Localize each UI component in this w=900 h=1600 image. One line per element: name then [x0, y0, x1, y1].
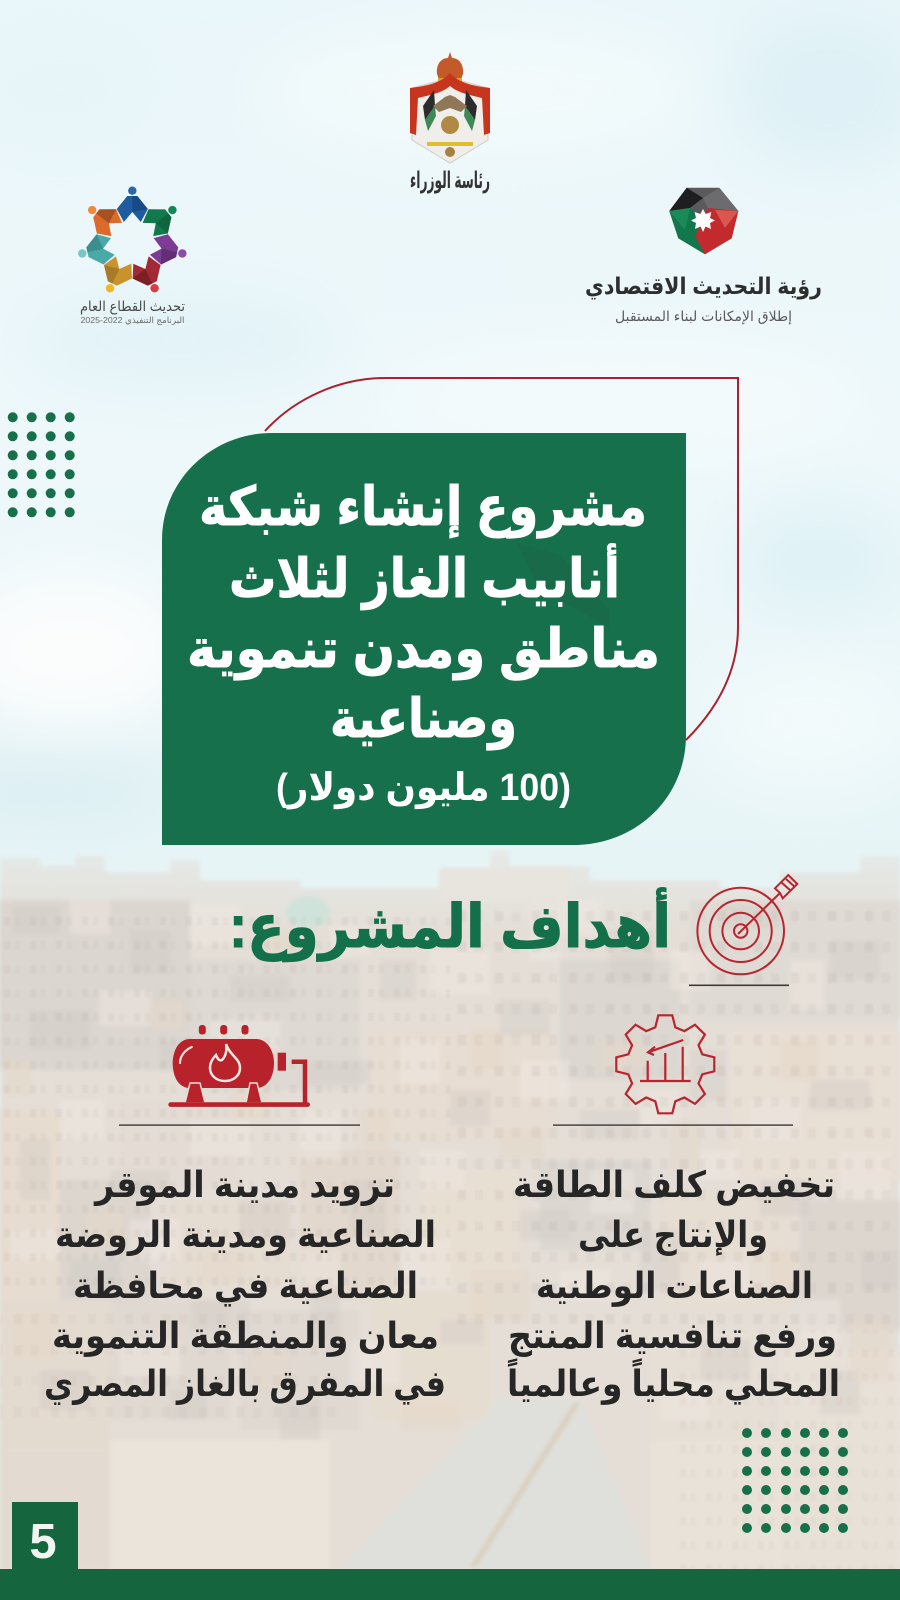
heading: project goals: أهداف المشروع:	[229, 887, 671, 962]
polygon emblem	[669, 188, 738, 254]
crown	[437, 52, 463, 84]
goal text: left column: في المفرق بالغاز المصري	[44, 1363, 446, 1405]
caption: رئاسة الوزراء	[410, 167, 490, 194]
flags	[423, 90, 477, 131]
mantle	[410, 73, 490, 135]
divider under heading icon	[689, 984, 789, 986]
icon: gas tank	[168, 1025, 310, 1107]
logo: public sector modernisation	[75, 186, 190, 325]
dots top left	[8, 412, 75, 517]
goal text: right column: المحلي محلياً وعالمياً	[507, 1358, 840, 1405]
title line 2: أنابيب الغاز لثلاث	[229, 543, 620, 610]
title panel red outline	[265, 378, 738, 740]
goal text: left column: الصناعية ومدينة الروضة	[55, 1214, 436, 1256]
star	[445, 147, 455, 157]
logo: economic modernisation vision	[585, 188, 822, 325]
goal text: right column: ورفع تنافسية المنتج	[508, 1315, 837, 1357]
goal text: left column: معان والمنطقة التنموية	[52, 1315, 439, 1357]
background: faded city photograph	[0, 850, 900, 1600]
goal text: right column: الصناعات الوطنية	[536, 1265, 813, 1307]
star	[691, 209, 715, 232]
title line 3: مناطق ومدن تنموية	[187, 619, 660, 680]
globe	[441, 116, 459, 134]
icon: target with arrow	[697, 875, 797, 974]
icon: gear with falling cost chart	[616, 1015, 714, 1113]
goal text: left column: تزويد مدينة الموقر	[93, 1164, 395, 1206]
goal text: right column: تخفيض كلف الطاقة	[513, 1164, 835, 1206]
background: sky with clouds	[0, 0, 900, 900]
title line 4: وصناعية	[330, 689, 517, 750]
figures ring	[75, 186, 190, 299]
logo tagline: إطلاق الإمكانات لبناء المستقبل	[615, 308, 792, 325]
title panel	[162, 433, 686, 845]
page number: 5	[29, 1515, 57, 1569]
page number	[12, 1502, 78, 1569]
goal text: left column: الصناعية في محافظة	[73, 1265, 418, 1307]
goal text: right column	[507, 1164, 840, 1405]
budget line: (100 مليون دولار)	[276, 767, 571, 810]
banner	[427, 142, 473, 146]
footer band	[0, 1569, 900, 1600]
goal text: right column: والإنتاج على	[578, 1214, 768, 1256]
dots bottom right	[742, 1428, 848, 1533]
shield	[412, 78, 488, 163]
title line 1: مشروع إنشاء شبكة	[199, 477, 647, 538]
logo title: رؤية التحديث الاقتصادي	[585, 273, 822, 300]
divider left column	[119, 1124, 360, 1126]
goal text: left column	[44, 1164, 446, 1405]
logo: Prime Ministry coat of arms	[410, 52, 490, 194]
logo subtitle: البرنامج التنفيذي 2022-2025	[81, 315, 184, 325]
logo title: تحديث القطاع العام	[80, 298, 185, 315]
divider right column	[553, 1124, 793, 1126]
eagle	[433, 95, 467, 112]
